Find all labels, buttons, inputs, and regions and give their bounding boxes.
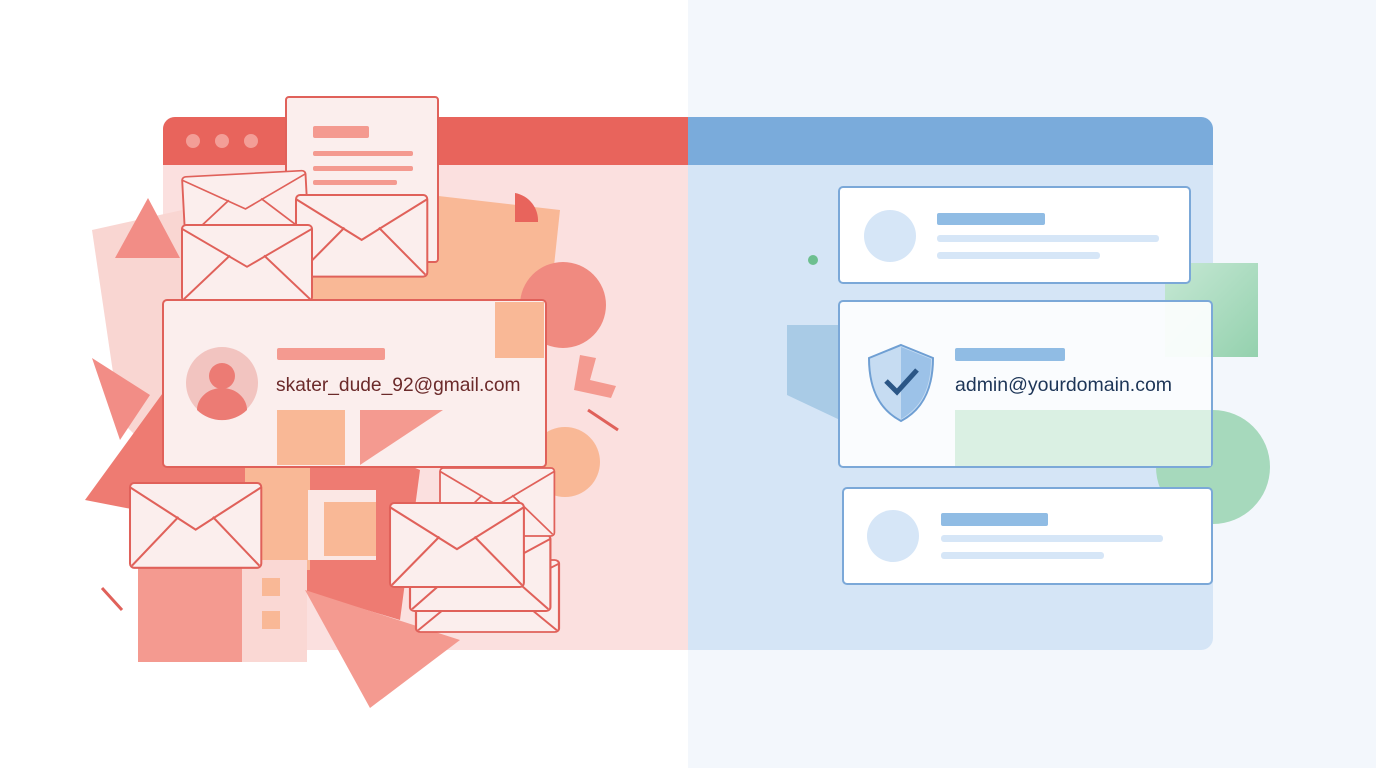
document <box>286 97 438 262</box>
background right <box>688 0 1376 768</box>
browser window <box>163 117 1213 650</box>
envelopes top <box>182 171 427 301</box>
card: top placeholder <box>839 187 1190 283</box>
card: personal email: skater_dude_92@gmail.com <box>276 375 521 396</box>
envelopes bottom <box>130 468 559 632</box>
left chaos shapes <box>85 180 618 708</box>
card: professional email: admin@yourdomain.com <box>955 374 1172 396</box>
card: personal email <box>163 300 546 467</box>
right decorative shapes <box>787 255 1270 524</box>
card: professional email <box>839 301 1212 467</box>
card: bottom placeholder <box>843 488 1212 584</box>
icon: shield <box>869 345 933 421</box>
